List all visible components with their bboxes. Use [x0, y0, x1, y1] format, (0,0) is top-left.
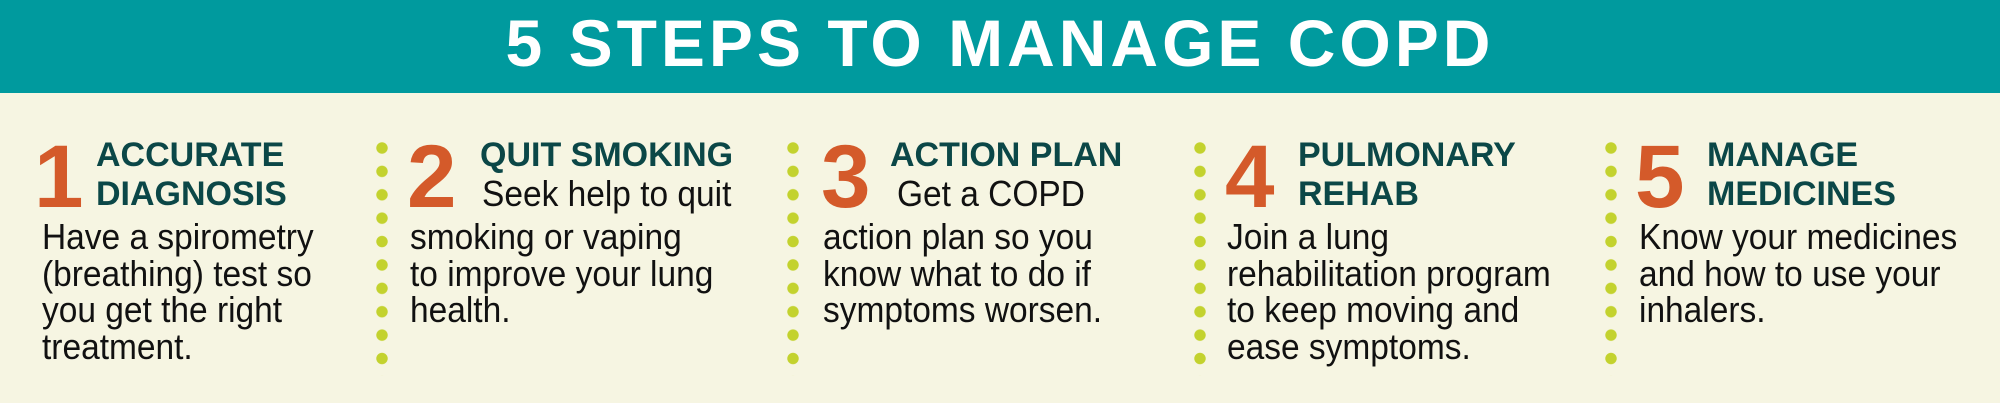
body 3: action plan so you — [823, 216, 1093, 257]
panel: step 5 — [1635, 126, 1957, 330]
body 2: health. — [410, 289, 511, 330]
body 4: to keep moving and — [1227, 289, 1519, 330]
heading 1: DIAGNOSIS — [96, 175, 287, 213]
body 4 — [1227, 216, 1551, 366]
heading 3: ACTION PLAN — [890, 136, 1122, 174]
number 4: 4 — [1225, 126, 1274, 226]
panel: step 2 — [407, 126, 733, 330]
body 5 — [1639, 216, 1957, 330]
heading 1: ACCURATE — [96, 136, 284, 174]
body 5: and how to use your — [1639, 252, 1941, 294]
body 2 — [410, 216, 713, 330]
title: 5 STEPS TO MANAGE COPD — [506, 6, 1494, 80]
heading 1 — [96, 136, 287, 213]
header banner — [0, 0, 2000, 93]
body 1: you get the right — [42, 289, 282, 330]
number 5: 5 — [1635, 126, 1684, 226]
body 1: treatment. — [42, 326, 193, 366]
heading 2: QUIT SMOKING — [480, 136, 733, 174]
body 3: know what to do if — [823, 252, 1091, 294]
panel: step 1 — [34, 126, 314, 366]
body 4: ease symptoms. — [1227, 326, 1471, 366]
heading 4 — [1298, 136, 1516, 213]
body 5: Know your medicines — [1639, 216, 1957, 257]
body 4: Join a lung — [1227, 216, 1389, 257]
heading 4: PULMONARY — [1298, 136, 1516, 174]
number 1: 1 — [34, 126, 84, 226]
body 2: smoking or vaping — [410, 216, 682, 257]
heading 5 — [1707, 136, 1896, 213]
body 3: symptoms worsen. — [823, 289, 1102, 330]
heading 4: REHAB — [1298, 175, 1419, 213]
divider dots 1 — [376, 142, 388, 376]
number 2: 2 — [407, 126, 456, 226]
body 1: Have a spirometry — [42, 216, 314, 257]
body 1: (breathing) test so — [42, 252, 312, 294]
panel: step 4 — [1225, 126, 1551, 366]
body 5: inhalers. — [1639, 289, 1766, 330]
heading 5: MANAGE — [1707, 136, 1858, 174]
body 2: to improve your lung — [410, 252, 713, 294]
divider dots 3 — [1194, 142, 1206, 376]
panel: step 3 — [821, 126, 1122, 330]
divider dots 2 — [787, 142, 799, 376]
body 4: rehabilitation program — [1227, 252, 1551, 294]
body 1 — [42, 216, 314, 366]
number 3: 3 — [821, 126, 870, 226]
body 3 — [823, 216, 1102, 330]
heading 5: MEDICINES — [1707, 175, 1896, 213]
body 2 first line: Seek help to quit — [482, 173, 731, 214]
divider dots 4 — [1605, 142, 1617, 376]
body 3 first line: Get a COPD — [897, 173, 1085, 214]
